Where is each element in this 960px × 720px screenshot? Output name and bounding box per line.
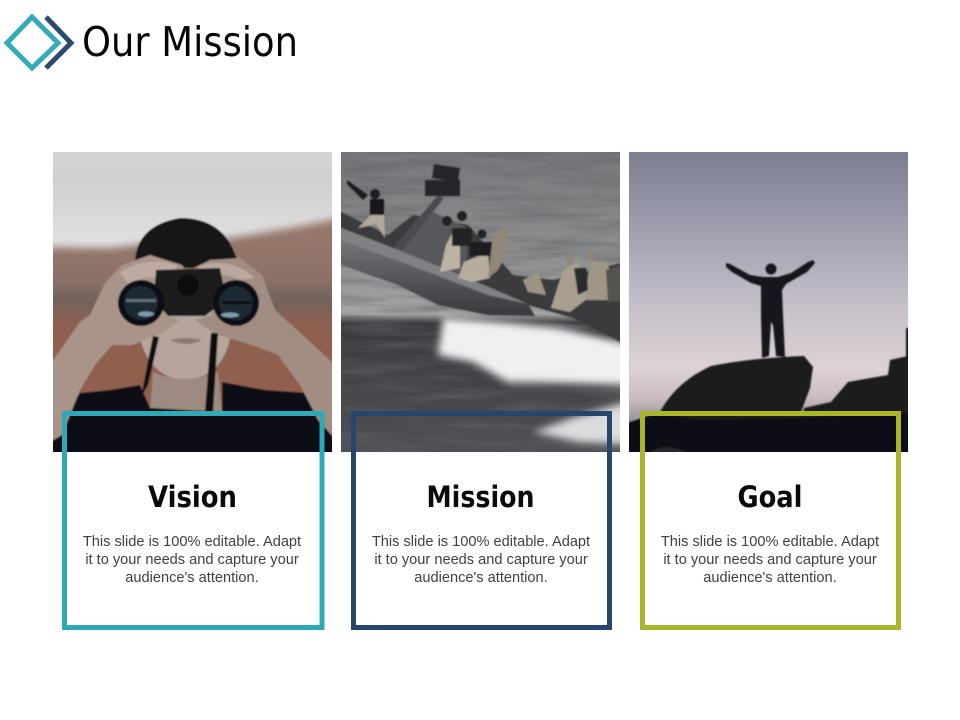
right arm and hand <box>193 257 332 438</box>
text: mission description: audience's attention. <box>414 570 548 586</box>
crew <box>358 189 633 312</box>
text: mission description: it to your needs and capture your <box>374 552 588 568</box>
heading: goal: Goal <box>738 480 802 514</box>
boat hull <box>341 240 536 317</box>
text: mission description: This slide is 100% editable. Adapt <box>372 534 590 550</box>
person silhouette <box>726 260 815 358</box>
foreground <box>629 413 908 452</box>
text: vision description: This slide is 100% editable. Adapt <box>83 534 301 550</box>
photo: man with binoculars <box>53 152 332 452</box>
shirt <box>53 382 332 452</box>
text: goal description: it to your needs and capture your <box>663 552 877 568</box>
heading: mission: Mission <box>426 480 534 514</box>
text: goal description: This slide is 100% editable. Adapt <box>661 534 879 550</box>
lower face <box>140 310 230 380</box>
text: goal description: audience's attention. <box>703 570 837 586</box>
main boulder <box>660 355 814 421</box>
neck <box>150 372 222 412</box>
binoculars <box>154 268 226 316</box>
gun mount <box>393 195 444 250</box>
text: vision description: audience's attention. <box>125 570 259 586</box>
title: Our Mission <box>82 18 298 66</box>
card: mission <box>354 414 610 628</box>
photo: person with raised arms on rock <box>629 152 908 452</box>
boat interior and crew base <box>341 211 620 342</box>
right rocks <box>802 356 908 418</box>
card: vision <box>64 414 322 628</box>
heading: vision: Vision <box>148 480 237 514</box>
photo: navy boat on water <box>333 152 633 452</box>
binocular straps <box>141 336 159 397</box>
text: vision description: it to your needs and capture your <box>85 552 299 568</box>
card: goal <box>642 414 898 628</box>
left arm and hand <box>45 255 187 445</box>
whitewater <box>438 318 633 385</box>
logo icon: diamond with chevron <box>7 17 71 68</box>
